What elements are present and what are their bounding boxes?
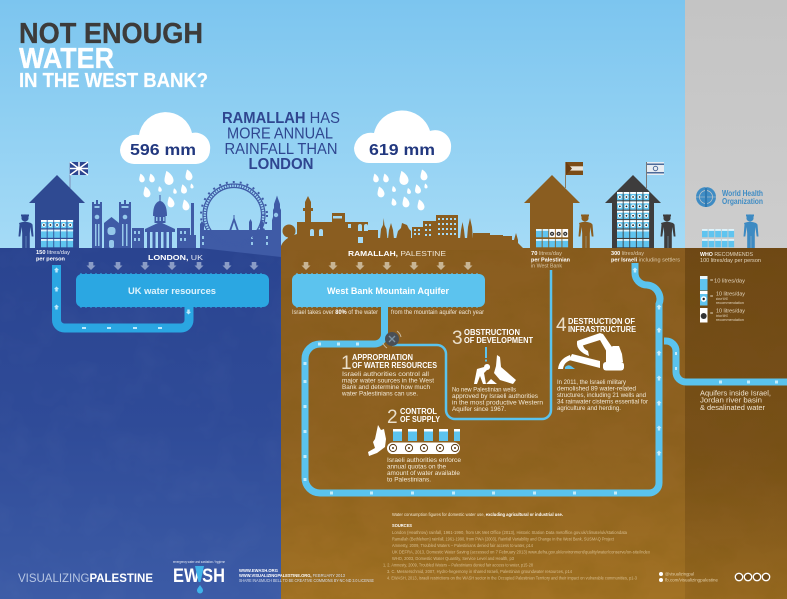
icon: digging worker <box>474 364 497 384</box>
footer: social links: @visualizingpal <box>665 572 694 576</box>
person: WHO <box>744 214 758 248</box>
title <box>19 18 208 92</box>
rainfall headline <box>222 110 340 173</box>
section 2: control of supply: 2 <box>387 407 398 428</box>
footer: consumption note and sources <box>383 512 651 580</box>
section 4: destruction of infrastructure: demolished 89 water-related <box>557 386 636 392</box>
WHO recommendation label: WHO RECOMMENDS <box>700 252 753 258</box>
text: Israel takes over 80%: from the mountain aquifer each year <box>391 310 484 316</box>
person: Palestinian <box>578 214 594 248</box>
footer: websites and license: SHARE INASMUCH BELL TO BE CREATIVE COMMONS BY-NC-ND 3.0 LICENSE <box>239 578 374 583</box>
section 3: obstruction of development: approved by Israeli authorities <box>452 393 539 400</box>
section 1: appropriation of water resources: major water sources in the West <box>342 378 434 384</box>
rainfall headline: LONDON <box>248 156 314 173</box>
Palestinian consumption label <box>531 251 571 270</box>
legend item: 10 litres/day: = <box>710 278 713 284</box>
text: Israel takes over 80% <box>292 310 484 316</box>
brown ground: Palestine side <box>281 248 787 599</box>
Palestinian consumption label: 70 litres/day <box>531 251 562 257</box>
person: Israeli <box>660 214 676 248</box>
UK house with flag <box>29 162 88 248</box>
footer: consumption note and sources: WHO, 2003, Domestic Water Quantity, Service Level and Health, p3 <box>392 556 515 561</box>
legend item: above WHO recommendation <box>700 291 745 306</box>
footer: consumption note and sources: SOURCES <box>392 523 412 528</box>
footer: social links: fb.com/visualizingpalestine <box>665 578 719 582</box>
section 4: destruction of infrastructure: 4 <box>556 315 567 336</box>
person: UK <box>18 214 34 248</box>
footer: consumption note and sources: 4. EWASH, 2013, Israeli restrictions on the WASH sector in the Occupied Palestinian Territory and their impact on vulnerable communities, p1-3 <box>387 576 638 580</box>
section 3: obstruction of development: 3 <box>452 328 463 349</box>
icon: excavator demolishing a pipe <box>558 333 624 370</box>
UK water resources box <box>76 274 269 307</box>
Palestinian house with flag <box>524 162 583 248</box>
footer: websites and license: WWW.VISUALIZINGPALESTINE.ORG, FEBRUARY 2013 <box>239 573 346 578</box>
footer: consumption note and sources: Amnesty, 2009, Troubled Waters – Palestinians denied fair access to water, p14 <box>392 543 534 548</box>
Palestinian consumption label: per Palestinian <box>531 258 571 264</box>
legend item: below WHO recommendation <box>700 308 745 322</box>
footer: consumption note and sources: Water consumption figures for domestic water use, excluding agricultural or industrial use. <box>392 512 563 517</box>
West Bank Mountain Aquifer box <box>292 274 485 307</box>
logo: EWASH: emergency water and sanitation / hygiene <box>173 560 225 564</box>
rainfall headline: RAINFALL THAN <box>224 141 338 158</box>
sky background <box>0 0 787 249</box>
icon: stop hand <box>368 425 386 456</box>
Israeli consumption label <box>611 251 680 264</box>
legend item: below WHO recommendation: below WHO <box>716 314 728 318</box>
WHO recommendation label <box>700 252 761 264</box>
section 1: appropriation of water resources <box>341 353 438 398</box>
WHO recommendation label: 100 litres/day per person <box>700 258 761 264</box>
legend: bottle values <box>700 276 745 322</box>
legend item: below WHO recommendation: recommendation <box>716 318 744 322</box>
section 4: destruction of infrastructure: structures, including 21 wells and <box>557 392 646 399</box>
cloud: Ramallah rainfall: 619 mm <box>369 142 435 159</box>
London skyline <box>92 195 281 257</box>
label: other water sources: & desalinated water <box>700 403 765 412</box>
UK water resources box: UK water resources <box>128 286 216 297</box>
Israeli house with flag <box>605 162 664 248</box>
raindrops: Ramallah <box>373 170 428 210</box>
legend item: 10 litres/day <box>700 276 745 290</box>
section 1: appropriation of water resources: Israeli authorities control all <box>342 371 430 378</box>
footer: consumption note and sources: 3. C. Messerschmid, 2007, Hydro-hegemony in shared Israeli, Palestinian groundwater resources, p14 <box>387 569 573 574</box>
footer: websites and license <box>239 568 374 583</box>
cloud: London rainfall: 596 mm <box>130 142 196 159</box>
legend item: above WHO recommendation: recommendation <box>716 301 744 305</box>
footer: consumption note and sources: 1, 2. Amnesty, 2009, Troubled Waters – Palestinians denied fair access to water, p15-28 <box>383 562 534 568</box>
WHO bottles <box>702 229 734 247</box>
icon: conveyor belt with bottles <box>387 429 460 454</box>
darker brown right band <box>685 248 787 599</box>
raindrops: London <box>139 170 194 210</box>
UK consumption label: 150 litres/day <box>36 250 70 256</box>
blue ground: London side <box>0 248 282 599</box>
UK consumption label <box>36 250 70 262</box>
title: IN THE WEST BANK? <box>19 70 208 92</box>
section 4: destruction of infrastructure: INFRASTRUCTURE <box>568 325 637 334</box>
section 2: control of supply <box>368 407 461 484</box>
WHO logo <box>696 187 763 207</box>
footer: consumption note and sources: Ramallah (Bethlehem) rainfall, 1961-1990, from PWA (2003), Rainfall Variability and Change in the West Bank, SUSMAQ Project <box>392 536 615 542</box>
label: other water sources <box>700 388 771 412</box>
section 1: appropriation of water resources: Bank and determine how much <box>342 384 430 391</box>
cloud: Ramallah rainfall <box>354 110 451 163</box>
rain infiltration arrows: London <box>86 262 258 270</box>
section 4: destruction of infrastructure: DESTRUCTION OF <box>568 317 635 326</box>
icon: stop hand <box>494 355 516 384</box>
title: NOT ENOUGH <box>19 18 203 50</box>
legend item: above WHO recommendation: = <box>710 294 713 300</box>
legend item: 10 litres/day: 10 litres/day <box>714 278 745 284</box>
logo: EWASH: EW SH <box>173 566 225 587</box>
main Palestinian distribution pipe <box>305 263 787 493</box>
pipe flow markers <box>304 268 778 494</box>
rainfall headline: MORE ANNUAL <box>227 126 333 142</box>
icon: exclamation mark <box>485 347 487 362</box>
section 4: destruction of infrastructure: In 2011, the Israeli military <box>557 379 627 386</box>
West Bank Mountain Aquifer box: West Bank Mountain Aquifer <box>327 286 449 297</box>
Ramallah skyline <box>281 196 523 250</box>
rain infiltration arrows: Ramallah <box>302 262 472 270</box>
section 2: control of supply: OF SUPPLY <box>400 415 441 424</box>
section 3: obstruction of development: OF DEVELOPMENT <box>464 336 533 345</box>
footer: social links <box>659 572 719 582</box>
UK water pipe <box>54 265 191 329</box>
rainfall headline: RAMALLAH HAS <box>222 110 340 127</box>
section 2: control of supply: amount of water available <box>387 470 460 477</box>
WHO logo: Organization <box>722 197 763 206</box>
section 3: obstruction of development: Aquifer since 1967. <box>452 406 506 413</box>
WHO logo: World Health <box>722 189 763 198</box>
label: other water sources: Aquifers inside Israel, <box>700 388 771 398</box>
footer: consumption note and sources: UK DEFRA, 2013, Domestic Water Saving (accessed on 7 February 2013) www.defra.gov.uk/environment/quality/water/conserve/on-site/index <box>392 550 651 554</box>
city label: London: LONDON, UK <box>148 253 203 262</box>
icon: valve <box>383 331 401 348</box>
legend item: above WHO recommendation: 10 litres/day <box>716 292 745 298</box>
section 1: appropriation of water resources: 1 <box>341 353 352 374</box>
footer: websites and license: WWW.EWASH.ORG <box>239 568 278 573</box>
section 2: control of supply: CONTROL <box>400 407 437 416</box>
legend item: below WHO recommendation: = <box>710 311 713 317</box>
section 2: control of supply: annual quotas on the <box>387 464 446 470</box>
cloud: London rainfall <box>120 112 210 164</box>
logo: EWASH <box>173 560 225 594</box>
section 3: obstruction of development: OBSTRUCTION <box>464 328 520 337</box>
city label: Ramallah: RAMALLAH, PALESTINE <box>348 249 446 258</box>
label: other water sources: Jordan river basin <box>700 396 762 404</box>
section 4: destruction of infrastructure: agriculture and herding. <box>557 405 621 412</box>
section 4: destruction of infrastructure <box>556 315 649 412</box>
Palestinian consumption label: in West Bank <box>531 264 562 270</box>
section 1: appropriation of water resources: APPROPRIATION <box>352 353 413 362</box>
Israeli consumption label: 300 litres/day <box>611 251 644 257</box>
section 4: destruction of infrastructure: 34 rainwater cisterns essential for <box>557 398 649 406</box>
legend item: below WHO recommendation: 10 litres/day <box>716 308 745 314</box>
Israeli consumption label: per Israeli including settlers <box>611 258 680 264</box>
section 2: control of supply: to Palestinians. <box>387 476 431 484</box>
London Eye <box>201 182 267 248</box>
section 3: obstruction of development <box>452 328 543 413</box>
UK consumption label: per person <box>36 256 66 262</box>
section 1: appropriation of water resources: water Palestinians can use. <box>341 390 418 398</box>
section 2: control of supply: Israeli authorities enforce <box>387 457 461 464</box>
section 3: obstruction of development: No new Palestinian wells <box>452 386 517 394</box>
footer: creative commons icons <box>735 573 770 581</box>
legend item: above WHO recommendation: above WHO <box>716 297 728 301</box>
thin pipe to Palestinian house <box>392 270 551 419</box>
logo: Visualizing Palestine: VISUALIZINGPALESTINE <box>18 573 153 585</box>
WHO grey sky panel <box>685 0 787 249</box>
footer: consumption note and sources: London (Heathrow) rainfall, 1961-1990, from UK Met Office (2013), Historic Station Data metoffice.gov.uk/climate/uk/stationdata <box>392 530 628 535</box>
section 1: appropriation of water resources: OF WATER RESOURCES <box>352 361 438 370</box>
text: Israel takes over 80%: Israel takes over 80% of the water <box>292 310 378 316</box>
title: WATER <box>19 43 114 75</box>
section 3: obstruction of development: in the most productive Western <box>452 400 543 406</box>
